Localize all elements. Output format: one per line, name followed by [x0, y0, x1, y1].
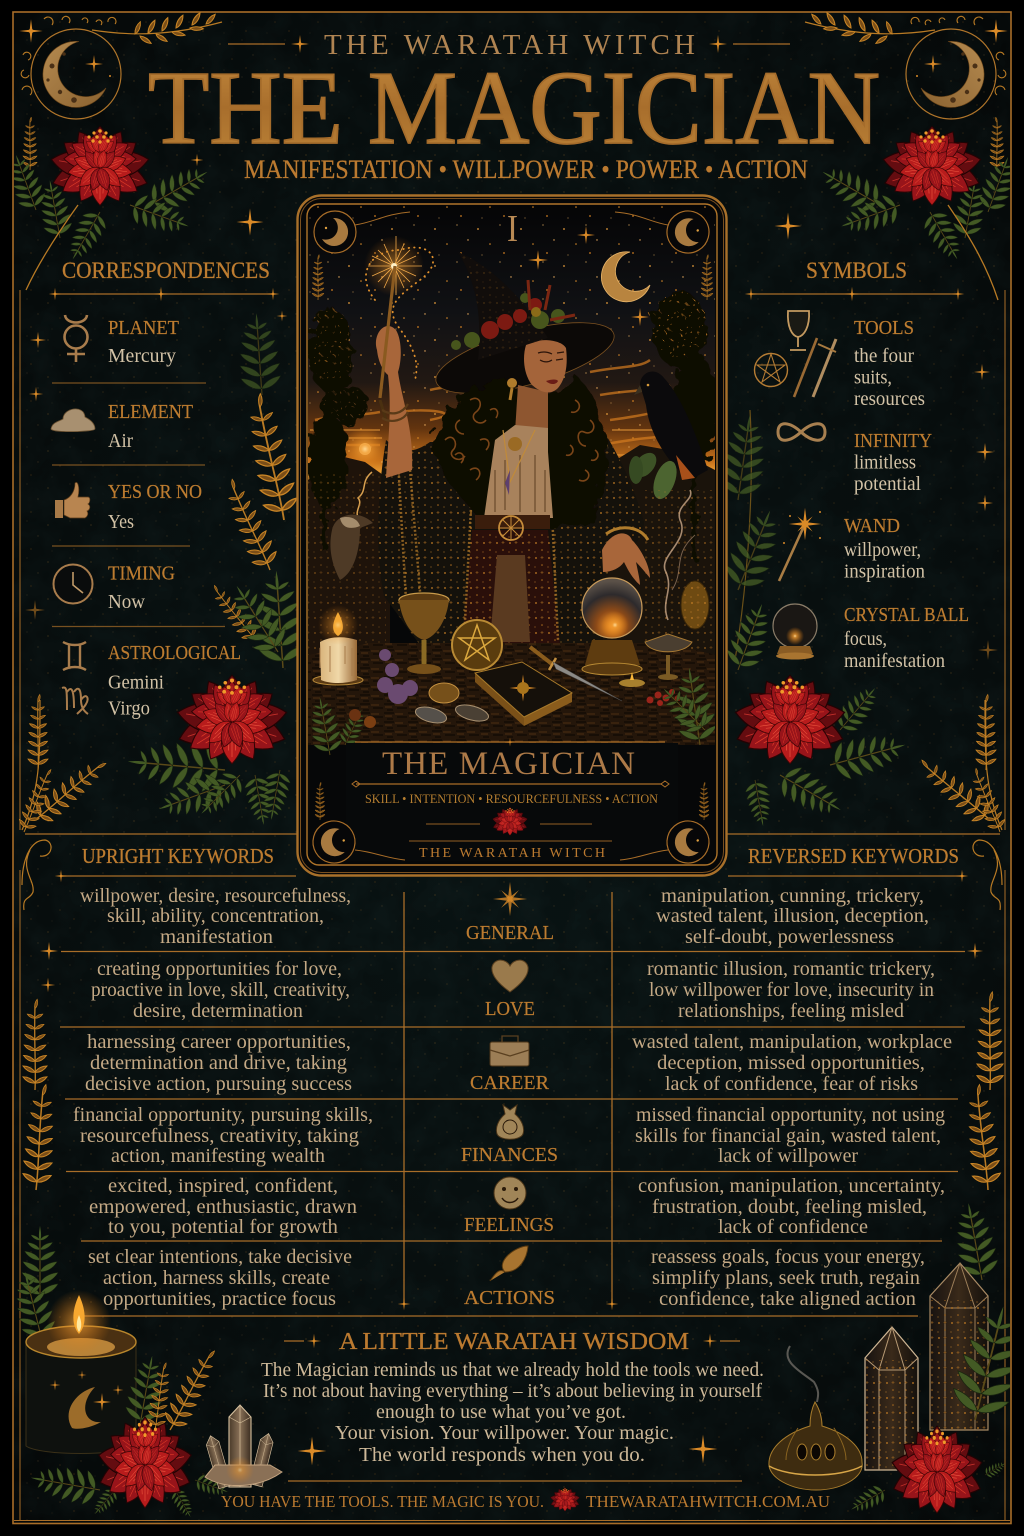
coins and crystals — [414, 683, 490, 726]
row: timing — [54, 562, 175, 613]
foliage: left column — [206, 312, 307, 670]
night sky with sunset — [308, 206, 715, 480]
candle — [313, 605, 363, 685]
row: love: romantic illusion, romantic trickery, — [647, 958, 935, 980]
card illustration — [306, 205, 719, 757]
row: crystal ball: manifestation — [844, 650, 945, 672]
crystal ball — [582, 578, 642, 675]
waratah: mid left — [126, 675, 292, 827]
heading: symbols: SYMBOLS — [806, 258, 907, 283]
row: infinity: INFINITY — [854, 430, 932, 452]
row: finances: resourcefulness, creativity, taking — [80, 1125, 359, 1147]
row: general: manipulation, cunning, trickery, — [661, 885, 924, 907]
witch: raised arm and wand — [376, 266, 412, 478]
row: element Air: Air — [108, 430, 133, 452]
card frame — [298, 196, 726, 876]
row: career: harnessing career opportunities, — [87, 1031, 351, 1053]
row: career — [85, 1031, 952, 1095]
row: element Air — [51, 401, 193, 452]
row: astrological — [62, 642, 241, 720]
ornament: scroll corners — [22, 840, 1002, 910]
wisdom lines: The world responds when you do. — [359, 1444, 645, 1466]
row: yes or no: Yes — [108, 511, 134, 533]
foliage: right column — [717, 410, 790, 676]
raven on the branch — [629, 372, 708, 502]
card foliage — [306, 665, 719, 757]
small candle — [619, 672, 645, 687]
row: career: determination and drive, taking — [90, 1052, 347, 1074]
row: infinity — [778, 424, 932, 495]
card keywords: SKILL • INTENTION • RESOURCEFULNESS • ACTION — [365, 792, 658, 806]
icon: card waratah — [426, 807, 592, 836]
row: planet Mercury — [64, 315, 179, 367]
subtitle keywords: MANIFESTATION • WILLPOWER • POWER • ACTION — [244, 155, 808, 184]
banksia — [681, 581, 709, 629]
crystals: bottom right — [865, 1263, 988, 1470]
row: feelings: excited, inspired, confident, — [108, 1175, 338, 1197]
card name: THE MAGICIAN — [382, 746, 635, 782]
incense burner: bottom right — [769, 1346, 862, 1490]
row: crystal ball — [773, 604, 969, 672]
row: tools: resources — [854, 388, 925, 410]
card numeral: I — [507, 208, 518, 250]
row: finances: skills for financial gain, wasted talent, — [635, 1125, 941, 1147]
incense burner and smoke — [645, 490, 695, 680]
row: career: decisive action, pursuing success — [85, 1073, 352, 1095]
ornament: table right foliage — [957, 991, 1004, 1280]
row: wand: willpower, — [844, 539, 921, 561]
wisdom lines — [261, 1359, 764, 1466]
witch: hat brim — [436, 322, 614, 394]
row: feelings: confusion, manipulation, uncertainty, — [638, 1175, 945, 1197]
row: feelings: frustration, doubt, feeling misled, — [652, 1196, 927, 1218]
corner ornament: top left moon — [19, 13, 222, 170]
row: wand — [779, 508, 925, 582]
waratah: top left — [3, 126, 215, 290]
witch: hair — [432, 372, 606, 525]
row: crystal ball: focus, — [844, 628, 887, 650]
row: astrological: Gemini — [108, 672, 164, 694]
footer tagline — [221, 1481, 830, 1511]
waratah: bottom left — [28, 1344, 231, 1521]
brand heading — [228, 29, 790, 61]
row: yes or no — [55, 481, 202, 533]
row: love: creating opportunities for love, — [97, 958, 342, 980]
heading: symbols — [745, 258, 964, 301]
row: finances: missed financial opportunity, not using — [636, 1104, 945, 1126]
row: yes or no: YES OR NO — [108, 481, 202, 503]
card maker name: THE WARATAH WITCH — [419, 846, 605, 861]
trees — [308, 291, 719, 560]
dagger — [530, 647, 622, 701]
row: actions: reassess goals, focus your energy, — [651, 1246, 925, 1268]
wisdom lines: The Magician reminds us that we already hold the tools we need. — [261, 1359, 764, 1381]
row: timing: TIMING — [108, 562, 175, 584]
row: tools — [754, 311, 925, 410]
row: general: manifestation — [160, 926, 273, 948]
candle jar: bottom left — [26, 1290, 136, 1454]
crystals: bottom left — [204, 1405, 282, 1489]
footer tagline: YOU HAVE THE TOOLS. THE MAGIC IS YOU. — [221, 1492, 544, 1511]
gold sprays: lower left — [16, 694, 112, 835]
row: career: lack of confidence, fear of risks — [665, 1073, 918, 1095]
row: love: proactive in love, skill, creativity, — [91, 979, 350, 1001]
row: general: wasted talent, illusion, deception, — [656, 905, 929, 927]
row: infinity: potential — [854, 473, 921, 495]
kookaburra — [330, 515, 373, 580]
row: love: low willpower for love, insecurity in — [649, 979, 934, 1001]
witch: hat crown — [451, 252, 575, 360]
row: finances: action, manifesting wealth — [111, 1145, 325, 1167]
row: love: relationships, feeling misled — [678, 1000, 904, 1022]
row: career: CAREER — [470, 1072, 550, 1094]
card inner frame — [307, 204, 717, 865]
wisdom lines: Your vision. Your willpower. Your magic. — [335, 1422, 674, 1444]
row: actions: action, harness skills, create — [103, 1267, 330, 1289]
row: tools: the four — [854, 345, 914, 367]
row: career: wasted talent, manipulation, workplace — [632, 1031, 952, 1053]
row: astrological: Virgo — [108, 698, 150, 720]
berries — [646, 689, 681, 706]
row: wand: inspiration — [844, 560, 925, 582]
row: element Air: ELEMENT — [108, 401, 193, 423]
row: love: LOVE — [485, 998, 535, 1020]
row: actions: opportunities, practice focus — [103, 1288, 336, 1310]
row: career: deception, missed opportunities, — [657, 1052, 925, 1074]
row: actions: simplify plans, seek truth, regain — [652, 1267, 920, 1289]
corner ornament: top right moon — [805, 13, 1008, 170]
row: actions — [88, 1246, 925, 1310]
heading: correspondences — [49, 258, 279, 301]
row: actions: ACTIONS — [464, 1287, 555, 1309]
row: finances: financial opportunity, pursuing skills, — [73, 1104, 373, 1126]
witch: face — [507, 340, 567, 400]
row: general: GENERAL — [466, 922, 554, 944]
witch: robe — [378, 412, 644, 645]
wand glow — [364, 236, 433, 380]
table — [308, 643, 715, 745]
row: astrological: ASTROLOGICAL — [108, 642, 241, 664]
row: actions: confidence, take aligned action — [659, 1288, 916, 1310]
row: feelings: empowered, enthusiastic, drawn — [89, 1196, 357, 1218]
column headings: UPRIGHT KEYWORDS — [82, 844, 274, 868]
tarot card — [298, 196, 726, 876]
waratah: mid right — [733, 675, 910, 828]
card deck — [475, 662, 572, 726]
row: infinity: limitless — [854, 452, 916, 474]
waratah: bottom right — [846, 1300, 1024, 1518]
row: finances: FINANCES — [461, 1144, 558, 1166]
card caption panel — [346, 738, 678, 861]
wisdom heading: A LITTLE WARATAH WISDOM — [339, 1329, 689, 1355]
row: tools: TOOLS — [854, 317, 914, 339]
wisdom lines: It’s not about having everything – it’s about believing in yourself — [263, 1380, 762, 1402]
pentacle — [452, 620, 502, 670]
heading: correspondences: CORRESPONDENCES — [62, 258, 270, 283]
row: general — [80, 881, 929, 948]
row: general: willpower, desire, resourcefulness, — [80, 885, 351, 907]
footer tagline: THEWARATAHWITCH.COM.AU — [586, 1492, 830, 1511]
celestial moon and stars — [528, 226, 650, 326]
gold sprays: lower right — [913, 694, 1008, 835]
card corner moons — [308, 206, 714, 868]
chalice — [399, 593, 449, 674]
panel: correspondences — [49, 258, 279, 720]
brand heading: THE WARATAH WITCH — [324, 29, 695, 61]
row: actions: set clear intentions, take decisive — [88, 1246, 352, 1268]
ornament: table left foliage — [16, 998, 58, 1335]
row: general: skill, ability, concentration, — [107, 905, 324, 927]
purple flowers — [377, 649, 418, 704]
wisdom: text block — [261, 1329, 764, 1466]
row: timing: Now — [108, 591, 146, 613]
column headings: REVERSED KEYWORDS — [748, 844, 959, 868]
row: planet Mercury: Mercury — [108, 345, 176, 367]
undergrowth — [308, 470, 715, 660]
sun and river landscape — [308, 427, 715, 660]
panel: symbols — [745, 258, 969, 672]
row: wand: WAND — [844, 515, 900, 537]
row: planet Mercury: PLANET — [108, 317, 179, 339]
row: feelings — [89, 1175, 945, 1238]
row: tools: suits, — [854, 366, 892, 388]
row: feelings: to you, potential for growth — [108, 1216, 338, 1238]
witch: blouse and neck — [475, 385, 553, 540]
column headings — [55, 844, 968, 882]
row: feelings: FEELINGS — [464, 1214, 554, 1236]
main title: THE MAGICIAN — [148, 49, 880, 166]
waratah: top right — [815, 126, 1021, 300]
row: love: desire, determination — [133, 1000, 303, 1022]
row: crystal ball: CRYSTAL BALL — [844, 604, 969, 626]
table: keyword grid — [55, 844, 968, 1316]
row: love — [91, 958, 935, 1022]
witch: lower hand — [602, 528, 650, 585]
row: finances — [73, 1104, 945, 1167]
wisdom lines: enough to use what you’ve got. — [376, 1401, 626, 1423]
row: general: self-doubt, powerlessness — [685, 926, 894, 948]
row: feelings: lack of confidence — [718, 1216, 868, 1238]
row: finances: lack of willpower — [718, 1145, 858, 1167]
